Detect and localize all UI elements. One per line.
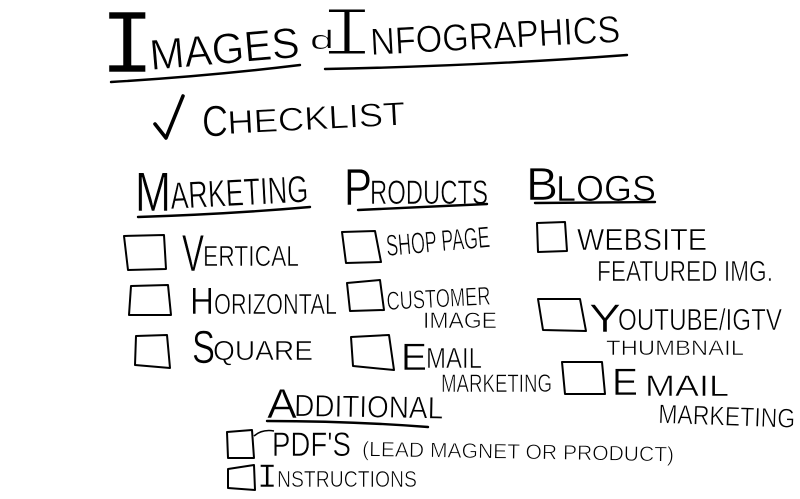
title: d <box>310 25 334 55</box>
item: shop page <box>342 221 491 263</box>
item: customer image <box>347 280 497 333</box>
panel: additional <box>227 380 674 498</box>
item: email marketing <box>351 335 552 398</box>
item: square <box>135 321 313 373</box>
checklist heading: C <box>202 97 228 146</box>
item: horizontal: H <box>190 281 214 323</box>
item: website featured image: WEBSITE <box>577 222 707 257</box>
item: youtube igtv thumbnail: Y <box>589 297 621 341</box>
item: email marketing: E <box>401 337 427 379</box>
item: shop page: SHOP PAGE <box>385 221 491 263</box>
heading: products <box>344 159 488 217</box>
panel: products <box>342 159 552 398</box>
item: square: QUARE <box>213 335 313 366</box>
panel: blogs <box>526 158 796 434</box>
item: vertical: ERTICAL <box>203 241 299 273</box>
heading: products: RODUCTS <box>370 174 488 212</box>
heading: additional <box>267 380 443 427</box>
item: horizontal: ORIZONTAL <box>214 289 337 321</box>
item: email marketing: MARKETING <box>441 370 552 398</box>
item: email marketing: MAIL <box>645 370 729 403</box>
panel: marketing <box>124 160 337 373</box>
heading: blogs: B <box>526 158 558 210</box>
item: instructions: NSTRUCTIONS <box>277 466 417 492</box>
heading: marketing: ARKETING <box>169 169 309 218</box>
item: vertical: V <box>182 225 204 283</box>
item: pdf's <box>227 426 674 466</box>
item: email marketing: E <box>612 362 638 404</box>
item: instructions: I <box>257 460 277 498</box>
item: pdf's: PDF'S <box>272 426 351 464</box>
item: email marketing <box>562 362 796 434</box>
item: email marketing: MAIL <box>426 343 482 375</box>
item: square: S <box>192 321 215 373</box>
title: NFOGRAPHICS <box>369 9 621 64</box>
heading: marketing: M <box>135 160 171 223</box>
item: instructions <box>228 460 417 498</box>
icon: check mark <box>155 96 183 138</box>
title <box>100 0 627 100</box>
item: vertical <box>124 225 299 283</box>
item: youtube igtv thumbnail: THUMBNAIL <box>606 337 744 360</box>
heading: additional: A <box>267 380 297 427</box>
item: website featured image <box>537 222 773 288</box>
heading: blogs <box>526 158 656 210</box>
title: MAGES <box>148 19 301 80</box>
heading: marketing <box>135 160 310 223</box>
checklist heading: HECKLIST <box>226 95 406 141</box>
heading: additional: DDITIONAL <box>294 388 443 426</box>
item: youtube igtv thumbnail <box>538 297 782 360</box>
item: customer image: CUSTOMER <box>386 281 491 316</box>
item: pdf's: (LEAD MAGNET OR PRODUCT) <box>362 438 674 466</box>
heading: products: P <box>344 159 372 217</box>
heading: blogs: LOGS <box>556 168 656 209</box>
item: horizontal <box>129 281 337 323</box>
title: I <box>100 0 155 100</box>
item: customer image: IMAGE <box>423 308 497 333</box>
